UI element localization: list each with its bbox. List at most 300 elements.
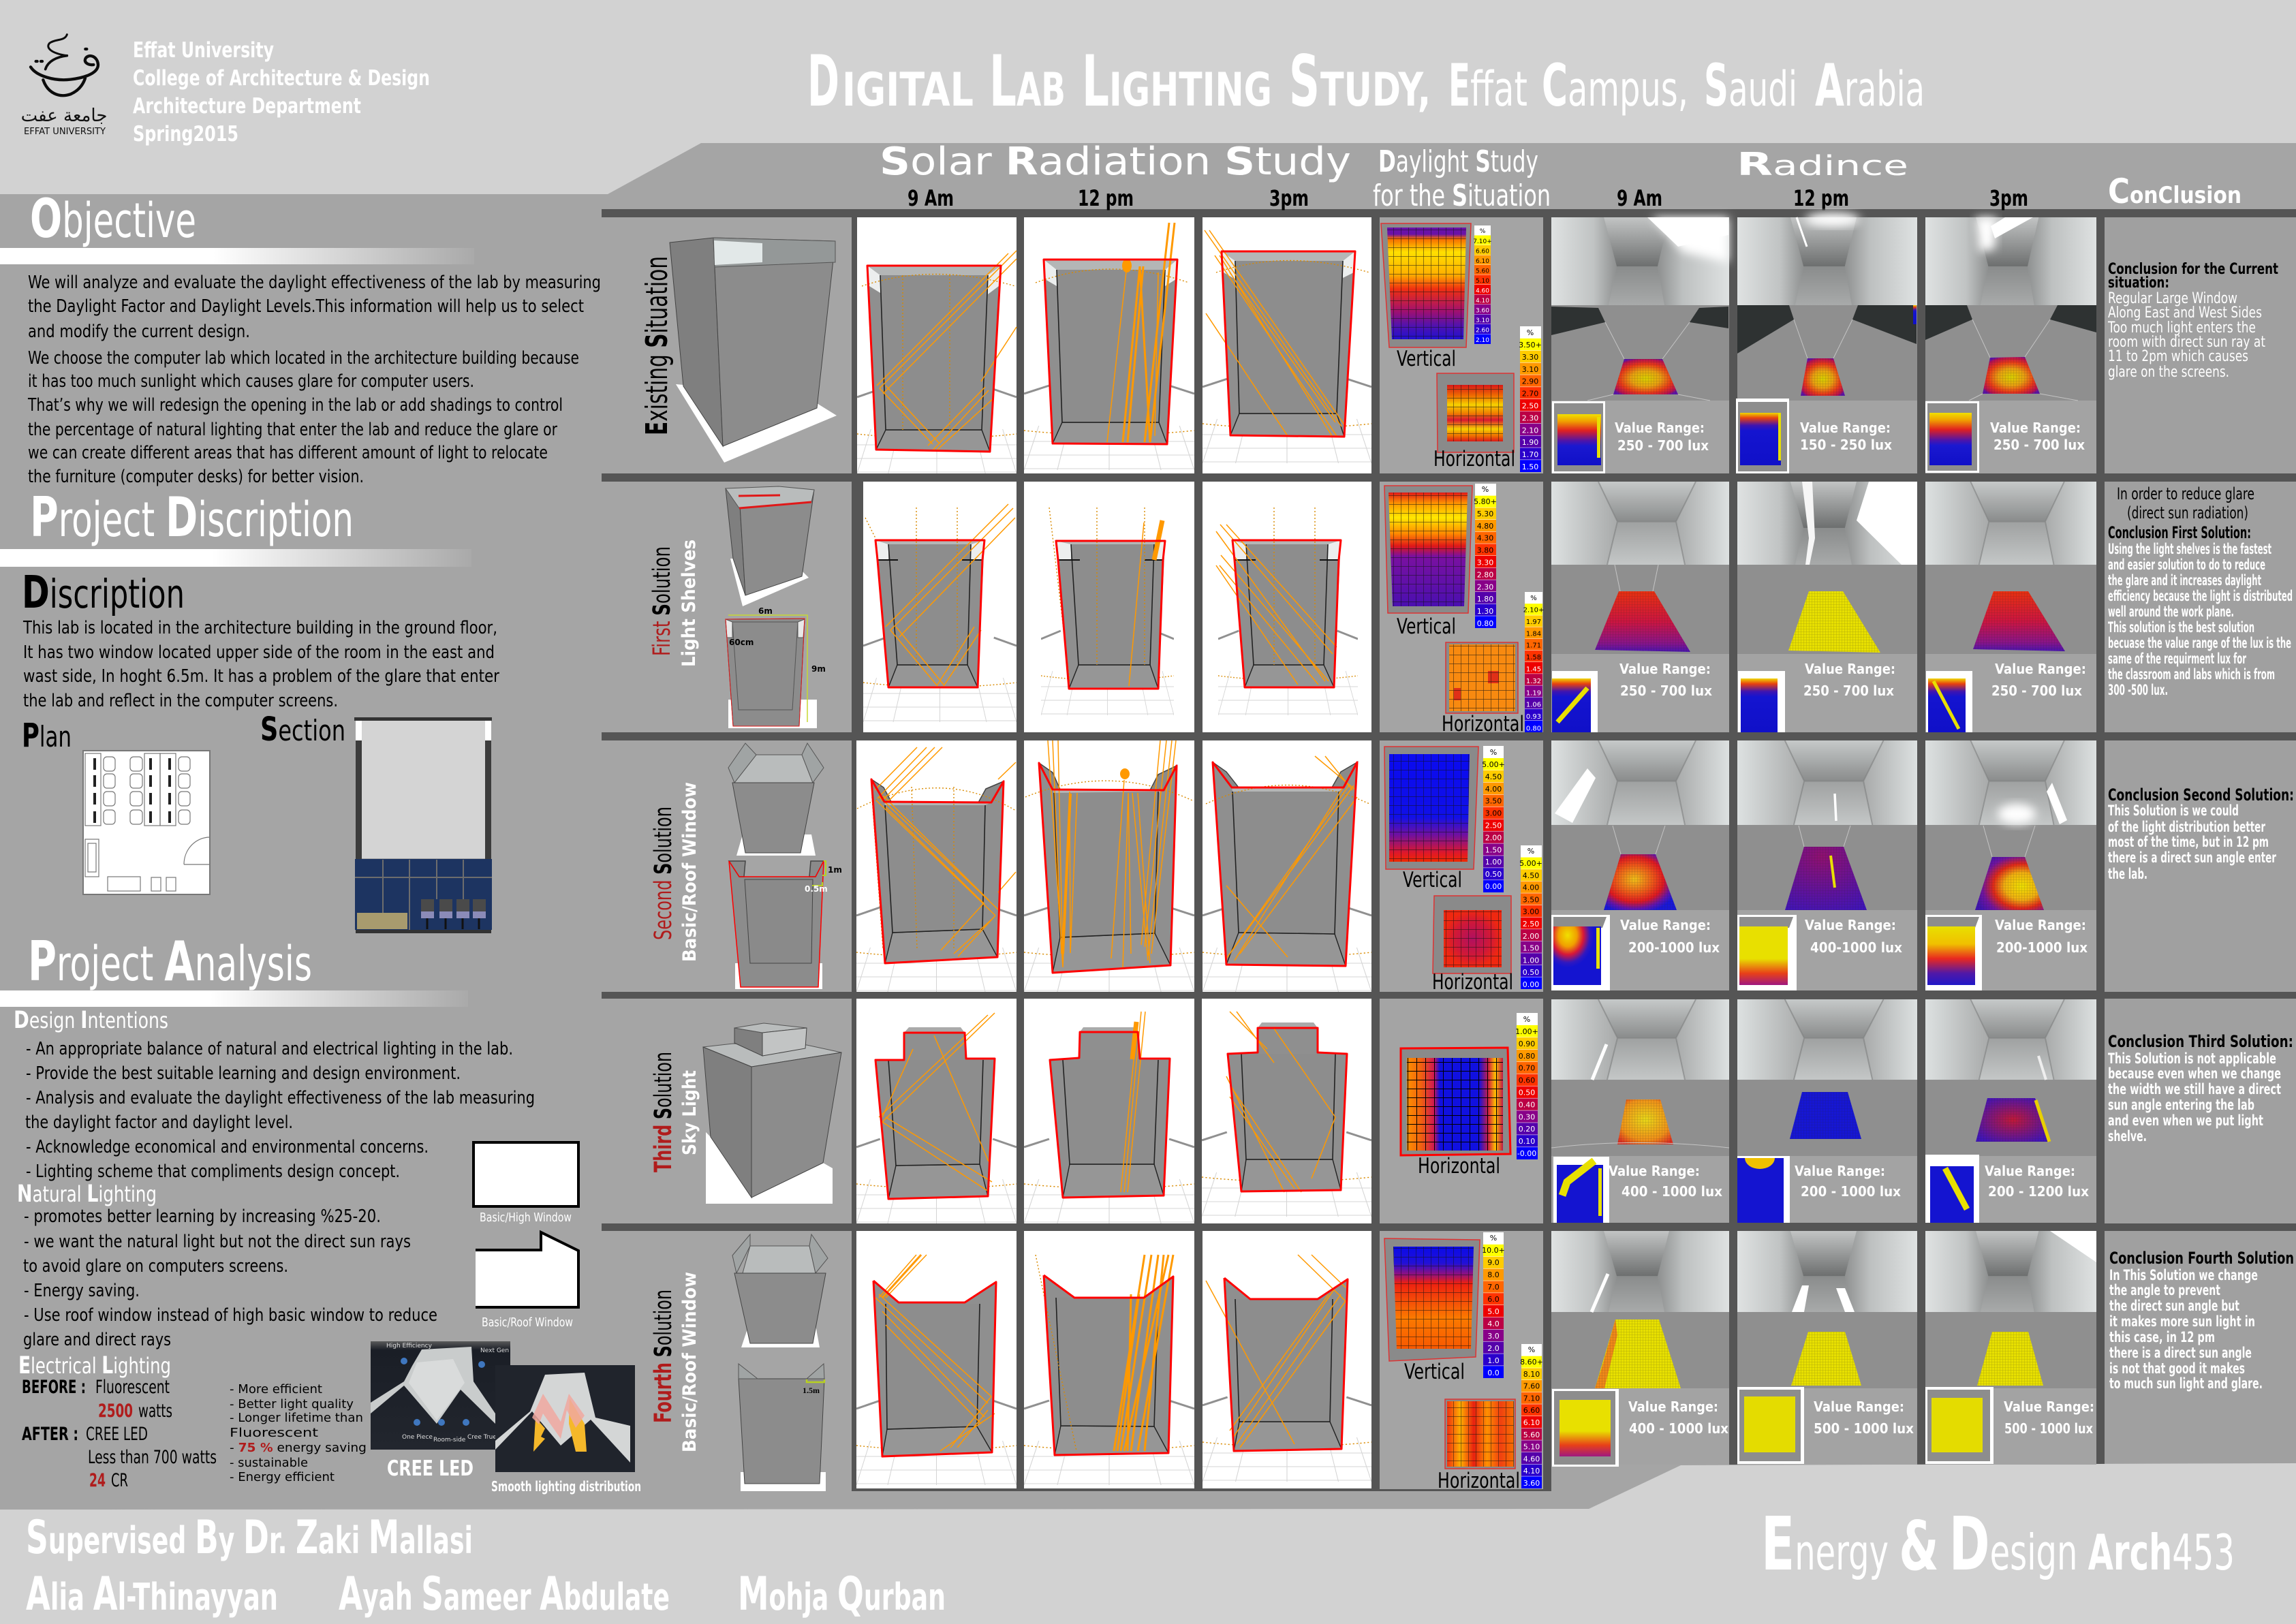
cell: fourth solution 9 am	[856, 1231, 1017, 1488]
cell: third solution 3 pm	[1202, 999, 1371, 1223]
existing legend vertical: %	[1480, 228, 1486, 235]
list: design intentions: - Lighting scheme that compliments design concept.	[26, 1161, 400, 1182]
column labels: solar times: 3pm	[1269, 185, 1309, 211]
second solution legend horizontal: 3.50	[1523, 895, 1539, 904]
first solution legend horizontal: 1.45	[1526, 666, 1541, 673]
text: objective: the percentage of natural lighting that enter the lab and reduce the glare or	[28, 420, 557, 440]
title: D	[807, 41, 839, 123]
university text: Architecture Department	[133, 94, 361, 119]
list: led benefits: Fluorescent	[230, 1426, 318, 1440]
title: A	[1815, 52, 1844, 120]
label: vertical: Vertical	[1397, 347, 1456, 371]
second solution vertical heat map	[1384, 747, 1478, 869]
title: S	[1704, 52, 1728, 120]
radiance existing 3 pm: Value Range:	[1990, 420, 2081, 436]
label: horizontal fourth: Horizontal	[1438, 1469, 1520, 1493]
fourth solution legend horizontal: %	[1528, 1345, 1535, 1354]
label: horizontal first: Horizontal	[1442, 712, 1524, 736]
image: smooth lighting fixture	[495, 1365, 635, 1472]
first solution legend horizontal: 1.71	[1526, 642, 1541, 650]
second solution legend vertical: 3.50	[1485, 797, 1502, 806]
radiance second 3 pm: Value Range:	[1995, 917, 2086, 933]
second solution legend vertical: 0.00	[1485, 882, 1502, 891]
radiance existing 9 am: Value Range:	[1615, 420, 1705, 436]
list: natural lighting: to avoid glare on computers screens.	[23, 1256, 288, 1277]
second solution legend horizontal: 2.50	[1523, 920, 1539, 928]
panel: solar radiation cells	[856, 217, 1371, 1488]
conclusion: current	[2107, 261, 2278, 381]
second solution legend horizontal: 1.50	[1523, 944, 1539, 953]
radiance second 3 pm	[1925, 740, 2096, 990]
title: S	[1289, 41, 1320, 123]
image: cree led fixture	[371, 1341, 514, 1450]
third solution legend: 0.70	[1519, 1064, 1535, 1073]
third solution legend: 0.60	[1519, 1076, 1535, 1085]
title: rabia	[1844, 61, 1925, 117]
second solution legend vertical: 3.00	[1485, 809, 1502, 818]
first solution legend horizontal	[1523, 592, 1544, 733]
cell: first solution 3 pm	[1203, 482, 1371, 732]
existing legend vertical: 2.10	[1476, 337, 1489, 344]
existing legend horizontal: 3.30	[1522, 353, 1538, 362]
third solution legend: 0.50	[1519, 1089, 1535, 1097]
fourth solution legend vertical: 4.0	[1487, 1320, 1500, 1328]
first solution legend vertical: 0.80	[1477, 619, 1493, 628]
footer: course: Energy & Design Arch453	[1761, 1502, 2235, 1587]
radiance third 9 am: Value Range:	[1609, 1163, 1700, 1179]
icon: basic roof window	[476, 1232, 578, 1330]
text: discription: This lab is located in the architecture building in the ground floor,	[22, 618, 497, 638]
second solution legend vertical: 1.50	[1485, 845, 1502, 854]
label: third solution: Third Solution	[650, 1052, 677, 1172]
logo	[21, 35, 107, 137]
conclusion: current: situation:	[2108, 275, 2169, 292]
existing legend vertical: 3.10	[1476, 317, 1489, 324]
heading: project discription	[0, 486, 471, 567]
list: design intentions: - Provide the best suitable learning and design environment.	[26, 1063, 461, 1084]
radiance fourth 9 am: 400 - 1000 lux	[1629, 1420, 1728, 1437]
cell: second solution 3 pm	[1203, 740, 1371, 992]
column labels: radiance times: 3pm	[1989, 185, 2028, 211]
third solution legend: 0.30	[1519, 1112, 1535, 1121]
text: objective: We choose the computer lab which located in the architecture building because	[28, 348, 579, 369]
list: design intentions: - Acknowledge economical and environmental concerns.	[26, 1137, 429, 1157]
column labels: solar times	[907, 185, 1309, 211]
third solution legend: %	[1523, 1015, 1530, 1024]
first solution legend vertical: 3.30	[1477, 559, 1493, 567]
model: fourth solution	[732, 1234, 828, 1347]
radiance first 3 pm	[1925, 482, 2096, 732]
list: led benefits: - Longer lifetime than	[230, 1411, 363, 1425]
second solution legend vertical: 2.00	[1485, 833, 1502, 842]
radiance third 3 pm: 200 - 1200 lux	[1988, 1183, 2089, 1200]
second solution legend vertical	[1482, 746, 1505, 892]
label: vertical fourth: Vertical	[1404, 1360, 1465, 1384]
radiance first 12 pm: 250 - 700 lux	[1803, 683, 1894, 699]
radiance fourth 3 pm: 500 - 1000 lux	[2004, 1420, 2093, 1437]
footer: students: Ayah Sameer Abdulate	[339, 1567, 670, 1621]
grid frame	[602, 209, 2296, 1491]
icon: basic roof window: Basic/Roof Window	[482, 1315, 573, 1330]
heading: project discription: Project Discription	[30, 486, 354, 549]
image: cree led fixture: Room-side	[433, 1437, 466, 1443]
heading: section: Section	[260, 710, 345, 749]
title: AB	[1017, 63, 1066, 117]
fourth solution legend vertical	[1482, 1232, 1505, 1378]
text: objective: and modify the current design.	[28, 322, 250, 342]
text: objective	[27, 272, 601, 487]
fourth solution legend horizontal: 4.10	[1523, 1467, 1540, 1475]
conclusion: first solution	[2108, 484, 2293, 698]
image: cree led fixture: High Efficiency	[386, 1343, 433, 1349]
logo: جامعة عفت	[21, 106, 107, 126]
text: discription: the lab and reflect in the computer screens.	[23, 691, 338, 711]
existing legend horizontal: %	[1527, 328, 1534, 337]
university text: Spring2015	[133, 122, 238, 146]
title	[807, 41, 1925, 123]
text: objective: That’s why we will redesign the opening in the lab or add shadings to control	[27, 395, 563, 416]
column labels: radiance times: 12 pm	[1793, 185, 1849, 211]
existing legend horizontal: 3.50+	[1519, 341, 1542, 349]
heading: objective	[0, 189, 474, 264]
radiance existing 3 pm	[1925, 217, 2096, 473]
label: second solution: Second Solution	[650, 807, 677, 940]
heading: design intentions: Design Intentions	[14, 1007, 168, 1034]
radiance second 3 pm: 200-1000 lux	[1996, 939, 2088, 956]
fourth solution legend horizontal: 7.60	[1523, 1382, 1540, 1391]
fourth solution legend vertical: 2.0	[1487, 1344, 1500, 1353]
cell: third solution 12 pm	[1024, 999, 1194, 1223]
first solution legend vertical: 4.80	[1477, 522, 1493, 531]
list: natural lighting	[23, 1206, 437, 1350]
existing horizontal heat map	[1437, 373, 1514, 452]
label: basic roof window fourth: Basic/Roof Window	[679, 1272, 700, 1452]
conclusion: current: glare on the screens.	[2108, 364, 2229, 381]
conclusion: first solution: 300 -500 lux.	[2108, 682, 2168, 698]
before and after: 2500	[98, 1401, 133, 1422]
image: cree led fixture: Next Gen	[480, 1347, 509, 1354]
radiance fourth 9 am	[1551, 1231, 1729, 1467]
existing legend horizontal	[1519, 326, 1542, 472]
existing legend horizontal: 2.90	[1522, 377, 1538, 386]
elevation: light shelves: 6m	[758, 606, 773, 616]
existing vertical heat map	[1381, 223, 1471, 347]
second solution legend horizontal: 3.00	[1523, 907, 1539, 916]
fourth solution legend horizontal: 5.10	[1523, 1443, 1540, 1452]
first solution legend vertical: 5.30	[1477, 510, 1493, 518]
second solution legend horizontal: 4.50	[1523, 871, 1539, 880]
existing legend horizontal: 2.50	[1522, 402, 1538, 410]
image: cree led fixture: Cree TrueWhite	[467, 1434, 514, 1441]
cell: first solution 9 am	[863, 482, 1017, 732]
label: light shelves: Light Shelves	[679, 540, 700, 667]
elevation: second solution: 1m	[828, 865, 842, 875]
existing legend vertical: 4.60	[1476, 287, 1489, 294]
list: design intentions: the daylight factor and daylight level.	[25, 1112, 293, 1133]
fourth solution legend horizontal: 4.60	[1523, 1454, 1540, 1463]
fourth solution legend vertical: 5.0	[1487, 1307, 1500, 1316]
icon: basic high window: Basic/High Window	[480, 1211, 572, 1225]
second solution legend vertical: 4.50	[1485, 772, 1502, 781]
radiance fourth 3 pm: Value Range:	[2004, 1399, 2094, 1415]
conclusion: fourth solution: the angle to prevent	[2109, 1282, 2220, 1298]
list: led benefits: - Energy efficient	[230, 1470, 335, 1484]
header band	[0, 0, 2296, 194]
existing legend vertical: 6.60	[1476, 248, 1489, 255]
fourth solution legend vertical: 10.0+	[1482, 1246, 1505, 1255]
elevation: second solution	[729, 861, 842, 989]
second solution legend vertical: 4.00	[1485, 785, 1502, 794]
fourth solution legend horizontal: 5.60	[1523, 1431, 1540, 1439]
elevation: light shelves: 60cm	[729, 638, 754, 647]
radiance existing 9 am: 250 - 700 lux	[1617, 437, 1709, 454]
cell: fourth solution 3 pm	[1203, 1231, 1371, 1488]
existing legend horizontal: 2.10	[1522, 426, 1538, 435]
second solution legend vertical: 5.00+	[1482, 760, 1505, 769]
text: objective: we can create different areas that has different amount of light to relocate	[28, 443, 548, 463]
third solution legend: 0.10	[1519, 1137, 1535, 1146]
fourth solution legend vertical: 8.0	[1487, 1270, 1500, 1279]
heading: natural lighting: Natural Lighting	[17, 1181, 157, 1208]
footer: students	[26, 1567, 946, 1621]
conclusion: fourth solution: this case, in 12 pm	[2109, 1329, 2215, 1345]
title: audi	[1728, 61, 1797, 117]
before and after: watts	[138, 1401, 172, 1422]
second solution legend horizontal: %	[1527, 847, 1534, 856]
second solution legend horizontal: 4.00	[1523, 884, 1539, 892]
first solution legend horizontal: %	[1530, 595, 1537, 602]
third solution legend: 0.80	[1519, 1052, 1535, 1061]
title: C	[1542, 52, 1568, 120]
label: fourth solution: Fourth Solution	[650, 1290, 677, 1423]
heading: conclusion: ConClusion	[2108, 172, 2241, 211]
fourth solution legend vertical: 3.0	[1487, 1332, 1500, 1341]
existing legend vertical: 2.60	[1476, 327, 1489, 334]
before and after: BEFORE :	[22, 1377, 86, 1398]
first solution legend vertical: 2.80	[1477, 570, 1493, 579]
first solution legend vertical: 1.80	[1477, 595, 1493, 604]
first solution legend horizontal: 0.80	[1526, 725, 1541, 733]
radiance fourth 12 pm: Value Range:	[1814, 1399, 1904, 1415]
heading: radince: R adince	[1737, 146, 1908, 183]
cell: first solution 12 pm	[1024, 482, 1194, 732]
radiance first 9 am: 250 - 700 lux	[1620, 683, 1712, 699]
fourth solution horizontal heat map	[1445, 1399, 1515, 1469]
text: discription	[22, 618, 499, 711]
text: objective: We will analyze and evaluate the daylight effectiveness of the lab by measuring	[28, 272, 601, 293]
third solution legend	[1515, 1013, 1538, 1159]
second solution legend horizontal: 0.00	[1523, 980, 1539, 989]
list: led benefits: - Better light quality	[230, 1397, 354, 1411]
label: cree led: CREE LED	[387, 1456, 474, 1481]
cell: existing 3 pm	[1203, 217, 1371, 473]
third solution horizontal heat map	[1401, 1048, 1510, 1155]
conclusion: second solution	[2108, 785, 2294, 882]
list: led benefits: - sustainable	[230, 1456, 308, 1470]
second solution legend horizontal: 5.00+	[1519, 859, 1542, 868]
first solution legend horizontal: 1.06	[1526, 702, 1541, 709]
third solution legend: 1.00+	[1515, 1027, 1538, 1036]
fourth solution legend vertical: 6.0	[1487, 1295, 1500, 1304]
list: led benefits: - More efficient	[230, 1382, 322, 1396]
fourth solution legend horizontal: 6.10	[1523, 1418, 1540, 1427]
radiance third 9 am: 400 - 1000 lux	[1622, 1183, 1722, 1200]
radiance first 12 pm: Value Range:	[1805, 661, 1895, 677]
third solution legend: 0.20	[1519, 1125, 1535, 1134]
cell: third solution 9 am	[856, 999, 1017, 1223]
before and after: CR	[111, 1470, 128, 1491]
list: natural lighting: - we want the natural light but not the direct sun rays	[24, 1232, 411, 1252]
radiance fourth 3 pm	[1925, 1231, 2096, 1464]
fourth solution vertical heat map	[1384, 1238, 1480, 1361]
first solution legend vertical: 1.30	[1477, 607, 1493, 616]
text: objective: the furniture (computer desks) for better vision.	[28, 467, 364, 487]
before and after: 24	[89, 1470, 106, 1491]
heading: plan: Plan	[22, 717, 72, 755]
text: discription: wast side, In hoght 6.5m. It has a problem of the glare that enter	[23, 666, 499, 687]
panel: daylight study	[1380, 217, 1544, 1493]
university text: Effat University	[133, 38, 274, 63]
first solution legend vertical: 2.30	[1477, 582, 1493, 591]
heading: daylight study	[1373, 144, 1551, 213]
radiance third 3 pm: Value Range:	[1985, 1163, 2075, 1179]
fourth solution legend horizontal: 6.60	[1523, 1406, 1540, 1415]
radiance second 12 pm: 400-1000 lux	[1810, 939, 1902, 956]
list: natural lighting: glare and direct rays	[23, 1330, 171, 1350]
radiance first 9 am: Value Range:	[1619, 661, 1711, 677]
title: ampus,	[1568, 61, 1688, 117]
radiance first 3 pm: 250 - 700 lux	[1991, 683, 2082, 699]
first solution legend vertical: 5.80+	[1474, 497, 1497, 506]
column labels: radiance times	[1617, 185, 2028, 211]
first solution vertical heat map	[1384, 486, 1472, 613]
section drawing	[354, 717, 492, 933]
conclusion: current: Regular Large Window	[2108, 290, 2237, 307]
radiance fourth 12 pm: 500 - 1000 lux	[1814, 1420, 1914, 1437]
second solution legend vertical: 0.50	[1485, 870, 1502, 879]
radiance first 12 pm	[1737, 482, 1917, 732]
existing legend horizontal: 3.10	[1522, 365, 1538, 374]
before and after: CREE LED	[86, 1424, 148, 1445]
footer: students: Alia Al-Thinayyan	[26, 1567, 278, 1621]
cell: fourth solution 12 pm	[1024, 1231, 1194, 1488]
first solution legend horizontal: 1.19	[1526, 689, 1541, 697]
text: objective: it has too much sunlight which causes glare for computer users.	[28, 371, 474, 392]
model: light shelves	[726, 486, 814, 606]
radiance second 12 pm: Value Range:	[1805, 917, 1896, 933]
list: design intentions: - Analysis and evaluate the daylight effectiveness of the lab measuring	[26, 1088, 535, 1108]
heading: project analysis	[0, 930, 468, 1007]
footer: supervisor: Supervised By Dr. Zaki Mallasi	[26, 1511, 473, 1565]
title: IGHTING	[1109, 63, 1272, 117]
first solution legend horizontal: 1.58	[1526, 654, 1541, 661]
existing legend horizontal: 2.30	[1522, 413, 1538, 422]
radiance fourth 9 am: Value Range:	[1628, 1399, 1718, 1415]
column labels: solar times: 12 pm	[1078, 185, 1134, 211]
second solution legend horizontal: 2.00	[1523, 932, 1539, 941]
fourth solution legend horizontal: 8.10	[1523, 1370, 1540, 1379]
elevation: fourth solution: 1.5m	[803, 1386, 820, 1395]
existing legend horizontal: 2.70	[1522, 390, 1538, 399]
title: L	[989, 41, 1017, 123]
label: horizontal second: Horizontal	[1432, 970, 1513, 995]
heading: daylight study: Daylight Study	[1378, 144, 1538, 179]
fourth solution legend horizontal	[1520, 1344, 1543, 1488]
model: existing	[670, 238, 837, 463]
radiance third 9 am	[1551, 999, 1729, 1223]
fourth solution legend horizontal: 3.60	[1523, 1479, 1540, 1488]
heading: electrical lighting: Electrical Lighting	[18, 1352, 171, 1379]
university text: College of Architecture & Design	[133, 66, 430, 91]
radiance first 3 pm: Value Range:	[1995, 661, 2086, 677]
elevation: light shelves	[726, 606, 826, 728]
existing legend horizontal: 1.90	[1522, 438, 1538, 447]
conclusion: third solution: shelve.	[2108, 1128, 2147, 1144]
first solution legend horizontal: 0.93	[1526, 713, 1541, 721]
heading: solar radiation study: Solar Radiation Study	[880, 140, 1351, 184]
label: vertical second: Vertical	[1403, 868, 1462, 892]
before and after: Less than 700 watts	[88, 1447, 217, 1468]
second solution legend vertical: 1.00	[1485, 858, 1502, 866]
cell: existing 9 am	[857, 217, 1017, 473]
cell: second solution 9 am	[856, 740, 1017, 992]
column labels: solar times: 9 Am	[907, 185, 954, 211]
label: horizontal third: Horizontal	[1418, 1154, 1500, 1178]
radiance existing 3 pm: 250 - 700 lux	[1994, 437, 2085, 453]
radiance second 9 am: Value Range:	[1620, 917, 1711, 933]
radiance existing 12 pm: Value Range:	[1800, 420, 1891, 436]
label: existing situation: Existing Situation	[640, 256, 674, 435]
list: design intentions	[25, 1039, 535, 1182]
list: natural lighting: - Energy saving.	[24, 1281, 140, 1301]
conclusion: first solution: (direct sun radiation)	[2127, 503, 2248, 522]
radiance third 3 pm	[1925, 999, 2096, 1223]
first solution legend horizontal: 1.97	[1526, 619, 1541, 626]
heading: daylight study: for the Situation	[1373, 178, 1551, 213]
model: second solution	[728, 743, 824, 856]
radiance second 9 am	[1551, 740, 1729, 990]
heading: objective: Objective	[30, 189, 196, 250]
second solution legend vertical: 2.50	[1485, 822, 1502, 830]
first solution legend vertical: 4.30	[1477, 534, 1493, 543]
radiance second 12 pm	[1737, 740, 1917, 990]
conclusion: second solution: the lab.	[2108, 866, 2147, 882]
radiance third 12 pm: Value Range:	[1795, 1163, 1885, 1179]
before and after: AFTER :	[22, 1424, 78, 1445]
radiance second 9 am: 200-1000 lux	[1628, 939, 1720, 956]
model: third solution	[703, 1023, 841, 1204]
elevation: fourth solution	[739, 1364, 826, 1491]
first solution legend vertical	[1474, 484, 1497, 628]
first solution horizontal heat map	[1446, 642, 1518, 713]
text: discription: It has two window located upper side of the room in the east and	[23, 642, 495, 663]
radiance existing 9 am	[1551, 217, 1729, 473]
cell: existing 12 pm	[1024, 217, 1194, 473]
title: IGITAL	[842, 63, 974, 117]
title: ffat	[1470, 61, 1527, 117]
first solution legend horizontal: 2.10+	[1523, 606, 1544, 614]
radiance existing 12 pm	[1736, 213, 1917, 473]
heading: discription: Discription	[22, 566, 185, 619]
second solution legend horizontal: 1.00	[1523, 956, 1539, 965]
third solution legend: 0.40	[1519, 1100, 1535, 1109]
radiance third 12 pm	[1737, 999, 1917, 1223]
first solution legend horizontal: 1.84	[1526, 630, 1541, 638]
label: basic roof window: Basic/Roof Window	[679, 782, 700, 962]
fourth solution legend horizontal: 8.60+	[1520, 1358, 1543, 1367]
second solution legend horizontal	[1519, 845, 1542, 989]
existing legend vertical: 3.60	[1476, 308, 1489, 315]
